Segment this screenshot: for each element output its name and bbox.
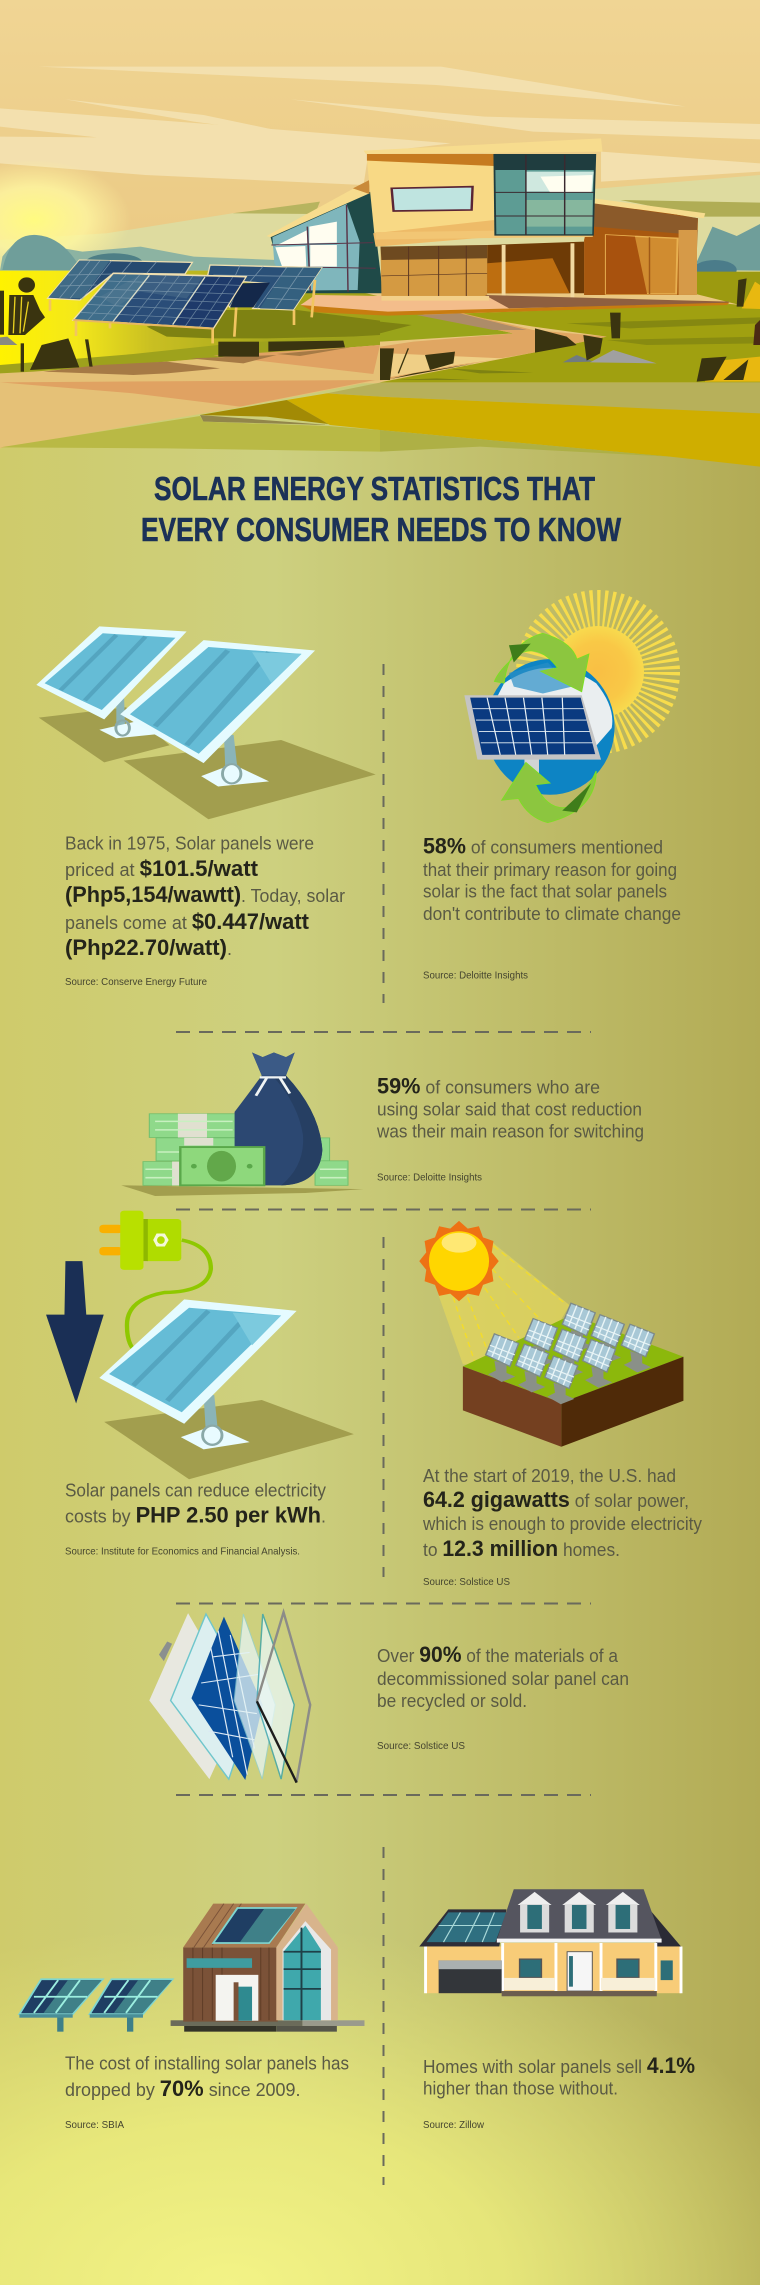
text block: cost reduction: 59% of consumers who are	[377, 1074, 600, 1098]
text block: climate reason: 58% of consumers mentioned	[423, 834, 663, 858]
text block: gigawatts	[422, 1466, 702, 1588]
sun rays	[538, 612, 658, 732]
house	[267, 138, 729, 316]
text block: home value: higher than those without.	[423, 2078, 618, 2098]
text block: panel price: Source: Conserve Energy Future	[65, 976, 207, 988]
icon: plugged panel with down arrow	[46, 1211, 354, 1479]
text block: climate reason: solar is the fact that solar panels	[423, 882, 667, 902]
text block: gigawatts: to 12.3 million homes.	[423, 1536, 620, 1561]
sky	[0, 0, 760, 383]
down arrow	[46, 1261, 104, 1403]
text block: install cost	[65, 2054, 349, 2131]
title	[141, 470, 622, 548]
text block: panel price: panels come at $0.447/watt	[65, 909, 310, 934]
icon: exploded solar panel layers	[149, 1612, 310, 1783]
left ground and path	[0, 271, 380, 452]
icon: money bag and cash	[121, 1053, 364, 1196]
text block: cost reduction: using solar said that cost reduction	[377, 1100, 642, 1120]
grass tufts and rocks, left	[0, 277, 345, 372]
text block: gigawatts: At the start of 2019, the U.S. had	[423, 1466, 676, 1486]
hills	[0, 224, 760, 280]
text block: climate reason: Source: Deloitte Insights	[423, 970, 528, 982]
divider: horizontal 1	[176, 1031, 591, 1033]
text block: gigawatts: Source: Solstice US	[423, 1576, 510, 1588]
clouds	[0, 67, 760, 185]
text block: panel price: Back in 1975, Solar panels were	[65, 834, 314, 854]
divider: vertical 2	[382, 1237, 384, 1577]
right ground and path	[380, 272, 760, 467]
distant fields	[0, 175, 760, 273]
text block: gigawatts: 64.2 gigawatts of solar power,	[423, 1487, 689, 1512]
text block: home value: Source: Zillow	[423, 2119, 484, 2131]
text block: climate reason: that their primary reason for going	[423, 860, 677, 880]
divider: horizontal 3	[176, 1602, 591, 1604]
text block: climate reason: don't contribute to climate change	[423, 904, 681, 924]
text block: electricity cost: Solar panels can reduce electricity	[65, 1480, 326, 1500]
text block: electricity cost: Source: Institute for Economics and Financial Analysis.	[65, 1546, 300, 1558]
title: SOLAR ENERGY STATISTICS THAT	[154, 470, 595, 507]
divider: horizontal 4	[176, 1794, 591, 1796]
text block: cost reduction: Source: Deloitte Insights	[377, 1172, 482, 1184]
text block: panel price: priced at $101.5/watt	[65, 856, 259, 881]
text block: panel price: (Php22.70/watt).	[65, 935, 232, 960]
icon: two solar panels	[36, 626, 376, 819]
text block: recycling: be recycled or sold.	[377, 1691, 527, 1711]
text block: recycling: Source: Solstice US	[377, 1740, 465, 1752]
text block: home value	[423, 2053, 695, 2131]
text block: recycling: decommissioned solar panel can	[377, 1669, 629, 1689]
text block: recycling: Over 90% of the materials of a	[377, 1642, 619, 1667]
title: EVERY CONSUMER NEEDS TO KNOW	[141, 511, 622, 548]
solar array in hero	[48, 260, 322, 343]
bottom glow	[0, 1900, 760, 2285]
text block: home value: Homes with solar panels sell 4.1%	[423, 2053, 695, 2078]
icon: sun over solar farm	[419, 1221, 683, 1447]
divider: vertical 1	[382, 664, 384, 1003]
text block: panel price	[65, 834, 345, 988]
text block: climate reason	[423, 834, 681, 982]
icon: wooden house with ground panels	[19, 1904, 364, 2032]
divider: horizontal 2	[176, 1208, 591, 1210]
plug and cable	[99, 1211, 211, 1349]
icon: globe with sun, panel and recycling arrows	[464, 612, 658, 823]
sun glow	[0, 160, 131, 280]
text block: install cost: Source: SBIA	[65, 2119, 124, 2131]
text block: panel price: (Php5,154/wawtt). Today, solar	[65, 882, 345, 907]
divider: vertical 3	[382, 1847, 384, 2185]
text block: install cost: dropped by 70% since 2009.	[65, 2076, 300, 2101]
text block: cost reduction: was their main reason for switching	[376, 1122, 644, 1142]
text block: electricity cost	[65, 1480, 326, 1558]
icon: suburban house with rooftop panels	[419, 1889, 681, 1996]
text block: recycling	[377, 1642, 629, 1752]
text block: gigawatts: which is enough to provide electricity	[422, 1514, 702, 1534]
hero illustration: modern house with solar panels	[0, 0, 760, 467]
text block: cost reduction	[376, 1074, 644, 1184]
grass tufts and rocks, right	[380, 278, 760, 382]
text block: install cost: The cost of installing solar panels has	[65, 2054, 349, 2074]
text block: electricity cost: costs by PHP 2.50 per kWh.	[65, 1502, 326, 1528]
